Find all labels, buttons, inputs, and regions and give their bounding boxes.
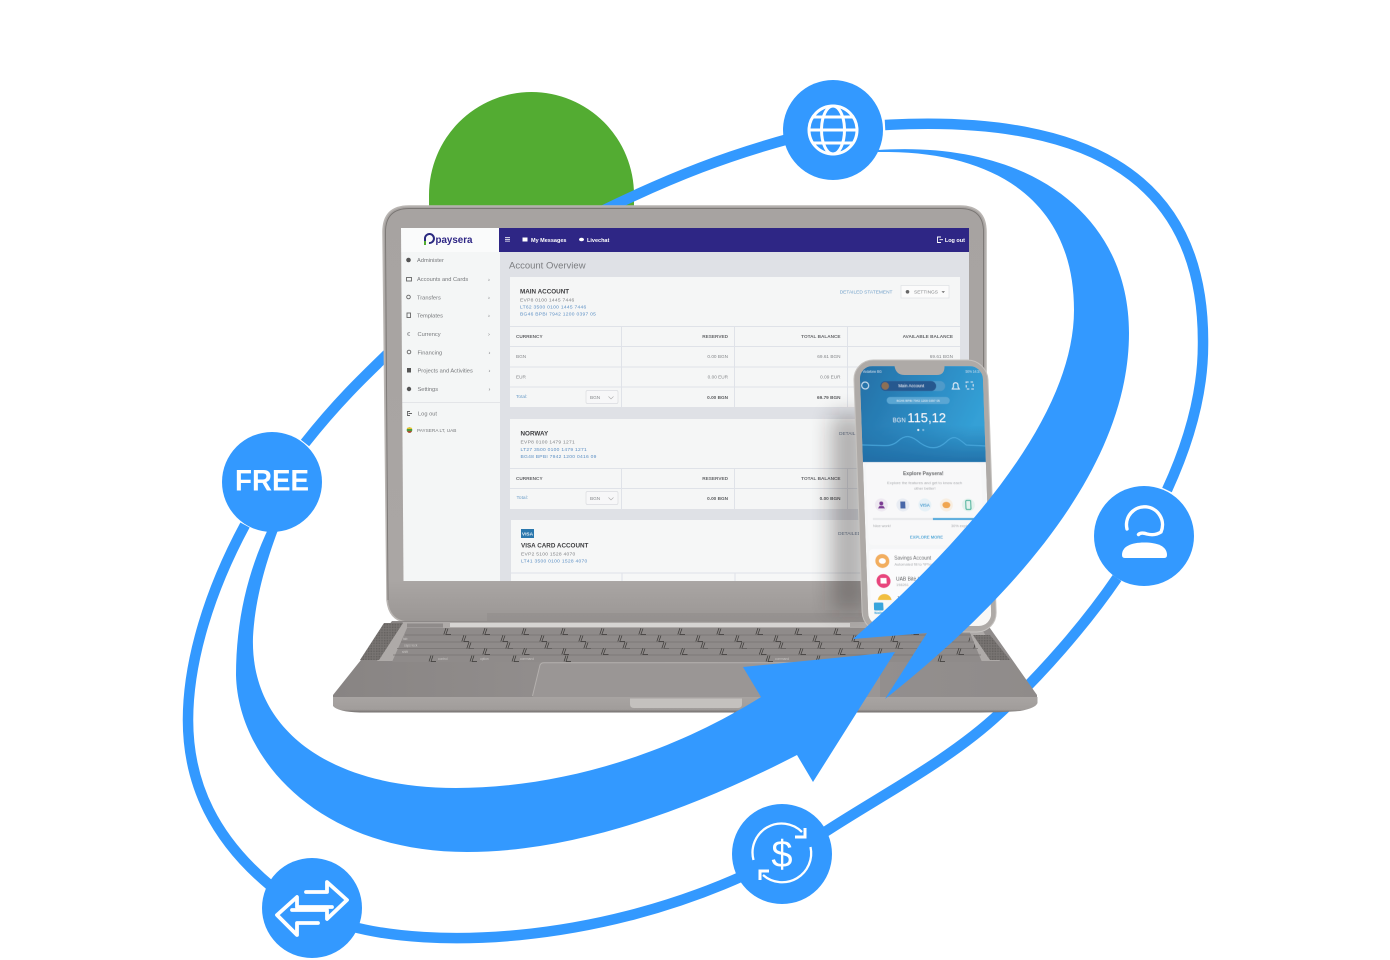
sidebar menu: Administer	[417, 258, 444, 264]
top navigation bar: My Messages	[531, 238, 566, 244]
card: norway: EVP8 0100 1479 1271	[520, 440, 575, 446]
sidebar menu: Projects and Activities	[418, 368, 473, 374]
sidebar menu: ›	[488, 332, 490, 338]
feature icons: VISA	[920, 503, 930, 508]
phone tab bar	[874, 600, 980, 626]
card: main account: RESERVED	[702, 334, 729, 339]
explore card: Nice work!	[873, 524, 891, 528]
orbit ring: support to globe	[885, 124, 1203, 490]
card: main account: 69.61 BGN	[817, 354, 840, 359]
icon: exchange arrows	[277, 882, 347, 935]
sidebar menu: ›	[488, 296, 490, 302]
explore card	[873, 471, 975, 539]
scan icon	[966, 382, 973, 389]
laptop base	[333, 621, 1038, 712]
badge: globe	[783, 80, 883, 180]
orbit ring: exchange to currency	[350, 875, 745, 938]
keyboard	[392, 624, 982, 662]
laptop screen	[401, 228, 969, 581]
card: main account: TOTAL BALANCE	[801, 334, 840, 339]
card: visa card account: LT41 3500 0100 1528 4070	[521, 558, 587, 564]
sidebar menu: Financing	[418, 350, 442, 356]
icon: dollar with circular arrows: $	[771, 834, 793, 876]
bell icon	[952, 383, 959, 389]
card: norway: RESERVED	[702, 476, 729, 481]
big swoosh arrow: from globe	[853, 149, 1129, 699]
sidebar menu: Settings	[418, 387, 438, 393]
sidebar menu: Templates	[417, 314, 443, 320]
phone screen	[860, 366, 992, 626]
card: norway: CURRENCY	[516, 476, 543, 481]
card: main account: SETTINGS	[914, 290, 938, 296]
account list: Savings Account	[894, 556, 932, 561]
account list	[875, 554, 932, 600]
card: norway	[510, 419, 858, 509]
card: main account	[510, 277, 960, 407]
card: main account: EVP8 0100 1445 7446	[520, 298, 575, 304]
card: norway: TOTAL BALANCE	[801, 476, 840, 481]
card: main account: 0.00 BGN	[707, 354, 728, 359]
sidebar menu: €	[407, 332, 411, 338]
explore card: Explore the features and get to know each	[887, 480, 962, 485]
light function strip	[450, 623, 850, 627]
explore card: 30% explored	[951, 524, 974, 528]
keyboard: tab	[403, 637, 408, 641]
card: norway: 0.00 BGN	[707, 496, 729, 501]
top navigation bar: Livechat	[587, 238, 609, 244]
deck	[333, 621, 1037, 699]
phone shadow	[832, 415, 866, 610]
infographic canvas	[182, 80, 1208, 958]
front edge	[333, 697, 1038, 712]
card: visa card account: DETAILED	[838, 531, 862, 537]
wave line	[862, 437, 985, 448]
explore card: other better!	[914, 486, 936, 490]
sidebar menu: ›	[488, 314, 490, 320]
sidebar menu: ›	[488, 387, 490, 393]
iban pill	[887, 397, 950, 404]
balance header: 50% 14:37	[965, 370, 981, 374]
orbit ring: globe to laptop	[600, 138, 792, 212]
sidebar menu: Log out	[418, 412, 437, 418]
keyboard: control	[438, 657, 448, 661]
card: visa card account: VISA CARD ACCOUNT	[521, 542, 589, 550]
badge: FREE	[222, 432, 322, 532]
account list: Automated fill to *iPhone	[894, 563, 936, 566]
card: main account: BGN	[516, 354, 526, 359]
progress bar	[873, 518, 933, 520]
balance header: BG46 BPBI 7942 1200 0397 05	[896, 399, 940, 403]
phone body	[853, 360, 997, 632]
silver keyboard surround	[377, 622, 1000, 661]
keyboard: command	[520, 657, 534, 661]
balance header	[860, 366, 986, 462]
green semicircle	[429, 92, 634, 210]
card: main account: EUR	[516, 374, 527, 380]
laptop hinge shadow	[487, 613, 907, 621]
account list: Jam	[897, 596, 906, 602]
card: main account: BGN	[590, 395, 600, 400]
keyboard: caps lock	[404, 644, 418, 648]
sidebar menu: ›	[488, 278, 490, 284]
pager dots	[917, 429, 919, 431]
card: main account: 0.00 EUR	[708, 374, 729, 380]
card: main account: BG46 BPBI 7942 1200 0397 05	[520, 312, 596, 318]
sidebar	[401, 228, 500, 581]
settings gear	[862, 382, 869, 389]
left speaker	[360, 623, 403, 660]
keyboard: option	[480, 657, 489, 661]
balance header: Main Account	[898, 384, 925, 388]
orbit ring: currency to support	[825, 578, 1117, 832]
card: norway: BG48 BPBI 7942 1200 0416 09	[520, 454, 597, 460]
card: norway: DETAILED	[839, 431, 863, 437]
account list: UAB Bitė Lietuva	[896, 577, 934, 582]
card: visa card account: EVP2 5100 1528 4070	[521, 552, 576, 558]
card: norway: 0.00 BGN	[820, 496, 841, 501]
top navigation bar	[499, 228, 969, 252]
sidebar menu: Transfers	[417, 296, 441, 302]
label: FREE: FREE	[235, 464, 309, 498]
account pill	[932, 380, 946, 392]
card: visa card account	[511, 520, 860, 581]
phone tab bar: Wallet	[874, 611, 885, 615]
big swoosh arrow: from FREE	[236, 525, 895, 852]
laptop lid	[383, 206, 986, 622]
sidebar menu: Currency	[418, 332, 441, 338]
sidebar menu	[402, 258, 500, 433]
phone	[853, 360, 997, 632]
card: norway: Total:	[516, 495, 528, 501]
keyboard: command	[775, 657, 789, 661]
card: main account: AVAILABLE BALANCE	[903, 334, 953, 339]
badge: currency exchange	[732, 804, 832, 904]
sidebar menu: ›	[488, 350, 490, 356]
card: main account: CURRENCY	[516, 334, 543, 339]
laptop	[333, 206, 1038, 712]
card: visa card account: VISA	[522, 532, 534, 538]
explore card: Explore Paysera!	[903, 471, 944, 477]
card: norway: LT27 3500 0100 1479 1271	[520, 447, 587, 453]
paysera logo: paysera	[436, 235, 473, 246]
icon: globe	[809, 106, 857, 154]
card: norway: NORWAY	[520, 430, 549, 438]
card: main account: Total:	[516, 394, 527, 400]
balance header: Vodafone BG	[863, 370, 882, 374]
card: norway: BGN	[590, 496, 600, 501]
card: main account: 0.00 BGN	[707, 395, 729, 400]
badge: transfers	[262, 858, 362, 958]
card: main account: 69.61 BGN	[930, 354, 953, 359]
sidebar menu: Accounts and Cards	[417, 277, 468, 283]
explore card: EXPLORE MORE	[910, 535, 943, 539]
phone notch	[895, 366, 945, 375]
account list: 198261	[896, 583, 909, 587]
card: main account: DETAILED STATEMENT	[840, 290, 893, 296]
badge: customer support	[1094, 486, 1194, 586]
right speaker	[973, 635, 1010, 660]
trackpad	[532, 663, 880, 697]
card: main account: 69.79 BGN	[817, 395, 841, 400]
page heading: Account Overview	[509, 260, 586, 272]
balance: BGN 115,12	[892, 410, 946, 425]
orbit ring: FREE to exchange	[188, 525, 272, 887]
card: main account: 0.09 EUR	[820, 374, 841, 380]
top navigation bar: Log out	[945, 238, 965, 244]
orbit ring: laptop to FREE	[305, 342, 400, 443]
keyboard: shift	[402, 650, 408, 654]
card: main account: MAIN ACCOUNT	[520, 288, 569, 296]
card: main account: LT62 3500 0100 1445 7446	[520, 304, 586, 310]
icon: headset agent	[1122, 507, 1167, 558]
sidebar menu: PAYSERA LT, UAB	[417, 428, 456, 433]
front notch	[630, 698, 742, 708]
sidebar menu: ›	[488, 368, 490, 374]
